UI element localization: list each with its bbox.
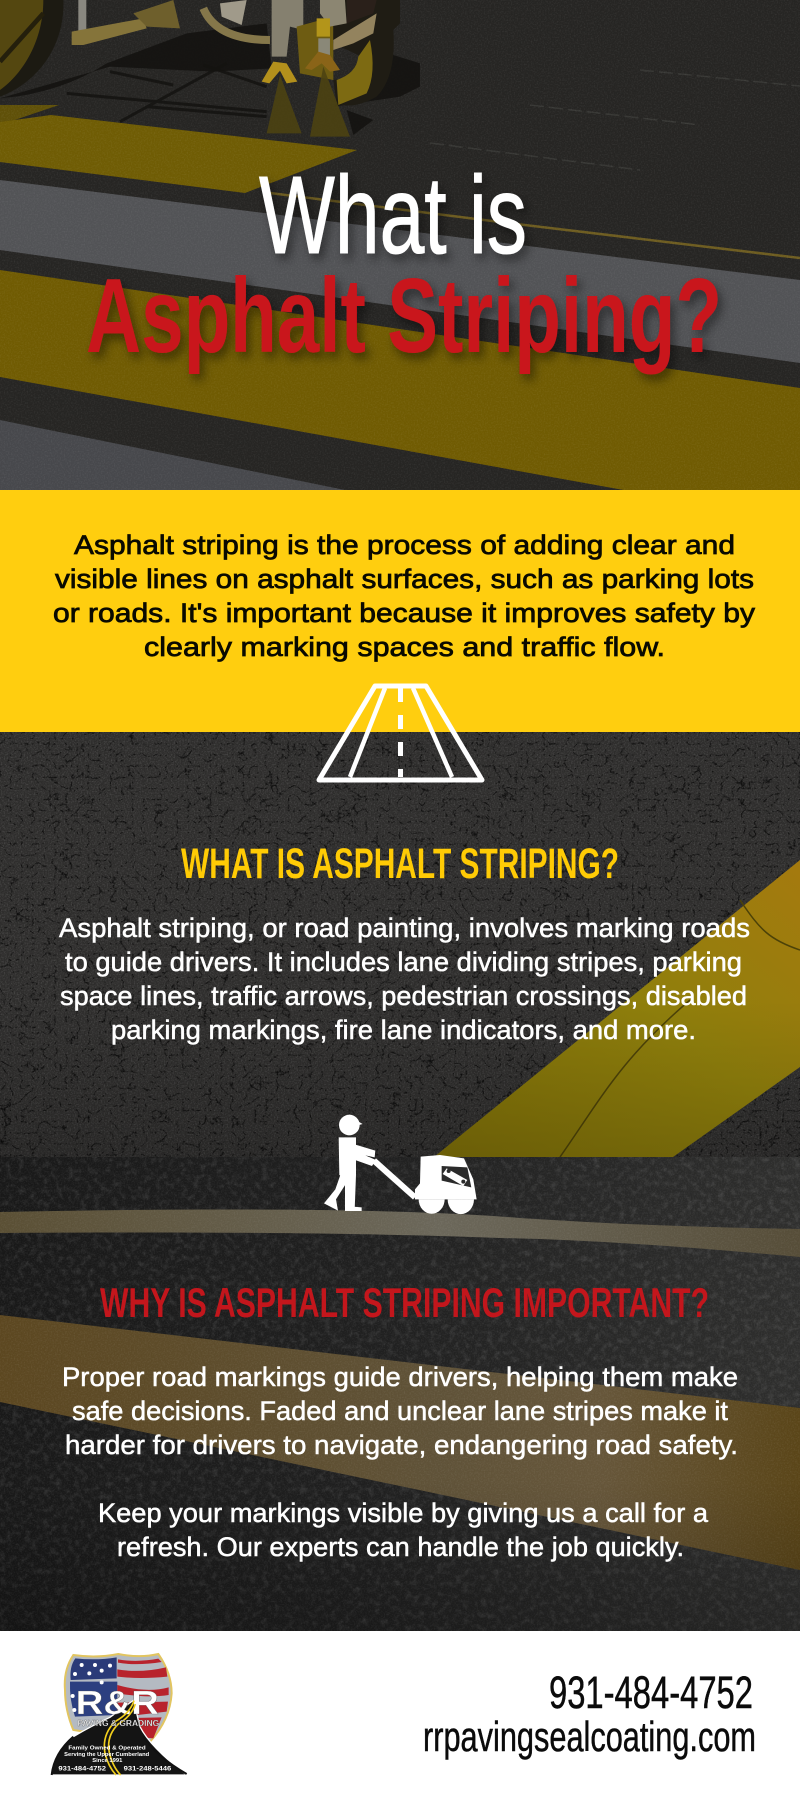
- section text: Asphalt striping, or road painting, involves marking roads: [59, 913, 750, 943]
- lower white road stripe: [0, 420, 345, 490]
- intro text: [53, 530, 756, 662]
- striping machine: [0, 0, 420, 137]
- section text: [62, 1362, 738, 1562]
- logo: R&R Paving & Grading: Since 1991: [92, 1758, 122, 1764]
- section text: parking markings, fire lane indicators, and more.: [111, 1015, 696, 1045]
- panel: hero header: [0, 0, 800, 522]
- lower yellow road stripe: [0, 270, 800, 490]
- intro text: clearly marking spaces and traffic flow.: [144, 632, 665, 662]
- section text: harder for drivers to navigate, endangering road safety.: [65, 1430, 738, 1460]
- panel: footer: [0, 1631, 800, 1798]
- tan road line: [0, 1210, 800, 1257]
- panel: why is asphalt striping important: [0, 1157, 800, 1631]
- logo: R&R Paving & Grading: Serving the Upper Cumberland: [64, 1752, 149, 1758]
- section text: Keep your markings visible by giving us a call for a: [98, 1498, 709, 1528]
- white road stripe: [0, 180, 800, 363]
- intro text: visible lines on asphalt surfaces, such as parking lots: [55, 564, 754, 594]
- section text: refresh. Our experts can handle the job quickly.: [117, 1532, 684, 1562]
- section text: safe decisions. Faded and unclear lane stripes make it: [72, 1396, 728, 1426]
- logo: R&R Paving & Grading: [52, 1654, 187, 1775]
- section text: space lines, traffic arrows, pedestrian crossings, disabled: [60, 981, 747, 1011]
- title: What is: What is: [259, 154, 527, 277]
- section text: to guide drivers. It includes lane dividing stripes, parking: [65, 947, 742, 977]
- panel: yellow intro: [0, 490, 800, 732]
- panel: what is asphalt striping: [0, 732, 800, 1157]
- icon: road: [319, 686, 482, 780]
- icon: worker with road compactor: [324, 1115, 477, 1214]
- upper yellow road stripe: [0, 70, 800, 258]
- intro text: or roads. It's important because it improves safety by: [53, 598, 756, 628]
- section text: [59, 913, 750, 1045]
- section heading: WHAT IS ASPHALT STRIPING?: [181, 840, 619, 888]
- logo road: [52, 1700, 187, 1775]
- section text: Proper road markings guide drivers, helping them make: [62, 1362, 738, 1392]
- yellow diagonal road stripe: [434, 860, 800, 1157]
- logo: R&R Paving & Grading: R&R: [76, 1685, 159, 1722]
- intro text: Asphalt striping is the process of adding clear and: [74, 530, 735, 560]
- logo: R&R Paving & Grading: 931-484-4752: [58, 1766, 107, 1772]
- tan diagonal road stripe: [0, 1315, 800, 1570]
- logo: R&R Paving & Grading: 931-248-5446: [124, 1766, 172, 1772]
- logo: R&R Paving & Grading: PAVING & GRADING: [77, 1718, 159, 1728]
- logo: R&R Paving & Grading: Family Owned & Operated: [68, 1746, 146, 1752]
